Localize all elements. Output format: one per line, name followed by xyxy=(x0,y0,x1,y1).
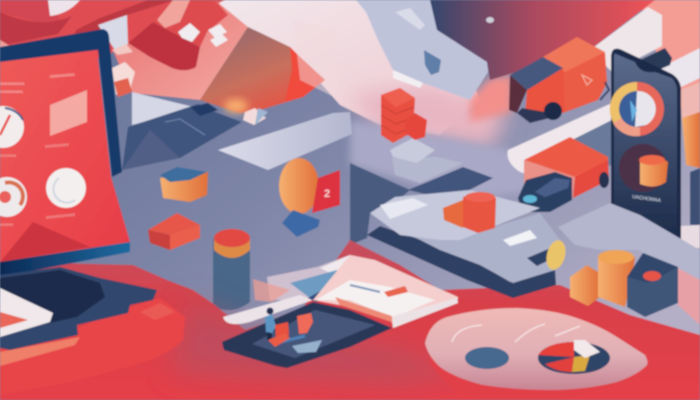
icon: coin stack in phone xyxy=(619,144,668,192)
background: lilac central lane xyxy=(350,120,540,200)
panel: coin stacks on platform xyxy=(443,192,496,233)
panel: top-left red forms xyxy=(0,0,248,100)
panel: central grey printer platform xyxy=(367,190,562,298)
decorative: faint wall panel xyxy=(293,20,340,100)
decorative: grey-blue lot behind lane xyxy=(548,120,612,175)
panel: translucent pie-chart disc xyxy=(425,308,648,400)
label: phone caption: UACHOMAA xyxy=(632,194,662,204)
panel: top-right navy to red gradient form xyxy=(430,0,655,80)
panel: dark slabs under stack xyxy=(350,163,493,245)
panel: top van xyxy=(509,37,609,123)
panel: red base disc under monitor xyxy=(0,267,185,395)
chart: translucent bars panel xyxy=(50,90,87,136)
background: pale upper wall xyxy=(200,0,480,135)
decorative: mauve floor glow xyxy=(170,300,470,385)
panel: right-edge stacks xyxy=(680,112,700,248)
panel: red base floor xyxy=(0,240,700,400)
icon: shield badge xyxy=(424,50,441,75)
panel: central grey slab xyxy=(218,112,352,170)
panel: paper card stack xyxy=(313,255,458,328)
chart: dial three xyxy=(0,177,27,217)
panel: lower walkway lane xyxy=(508,103,612,178)
background: central pink glow floor xyxy=(350,85,510,150)
panel: orange globe and red tag xyxy=(279,158,340,237)
chart: dial one xyxy=(0,106,24,148)
text: screen captions xyxy=(0,72,76,227)
panel: card ribbon xyxy=(223,255,350,324)
decorative: white band behind van xyxy=(590,7,662,72)
icon: white card on base xyxy=(0,288,53,337)
panel: orange and navy block stacks xyxy=(570,250,678,317)
text: screen captions: VVVVV xyxy=(0,222,14,227)
panel: dark smartphone on floor xyxy=(222,302,392,368)
icon: person with parcels xyxy=(265,308,313,347)
panel: pink cone building xyxy=(200,27,325,125)
panel: monitor xyxy=(0,29,130,277)
panel: orange globe and red tag: 2 xyxy=(324,188,330,200)
panel: stacked red coins xyxy=(381,88,427,143)
icon: glowing coin xyxy=(543,238,569,272)
decorative: pink strip at right edge xyxy=(678,268,700,325)
text: screen captions: NNMMMNNN xyxy=(0,81,25,86)
text: screen captions: WWMNNMN xyxy=(0,89,23,94)
panel: blue and orange coin tray xyxy=(160,167,208,202)
text: screen captions: VVVVVVVVVVV xyxy=(46,212,76,220)
background: pink wedge beside van xyxy=(470,75,512,122)
panel: blue-grey ribbon structure xyxy=(356,0,488,100)
panel: blue cylinder with red cap xyxy=(213,229,250,310)
panel: pale lilac wall and dark floor tile xyxy=(122,92,242,170)
icon: floating white cubes xyxy=(178,23,228,47)
chart: blue disc xyxy=(465,347,509,369)
panel: smartphone xyxy=(610,48,681,246)
chart: phone donut xyxy=(610,82,664,136)
red box xyxy=(148,213,200,250)
chart: dial two xyxy=(46,168,86,208)
chart: pie xyxy=(538,340,610,374)
panel: lower truck xyxy=(518,137,609,212)
panel: right grey platform xyxy=(558,203,700,300)
background: right pink wall xyxy=(640,0,700,120)
text: screen captions: MMMNNMNN xyxy=(50,72,75,79)
text: screen captions: VVVVVV xyxy=(0,153,16,158)
text: screen captions: VVVVVVVVV xyxy=(45,142,69,149)
panel: paper stack xyxy=(390,138,463,183)
